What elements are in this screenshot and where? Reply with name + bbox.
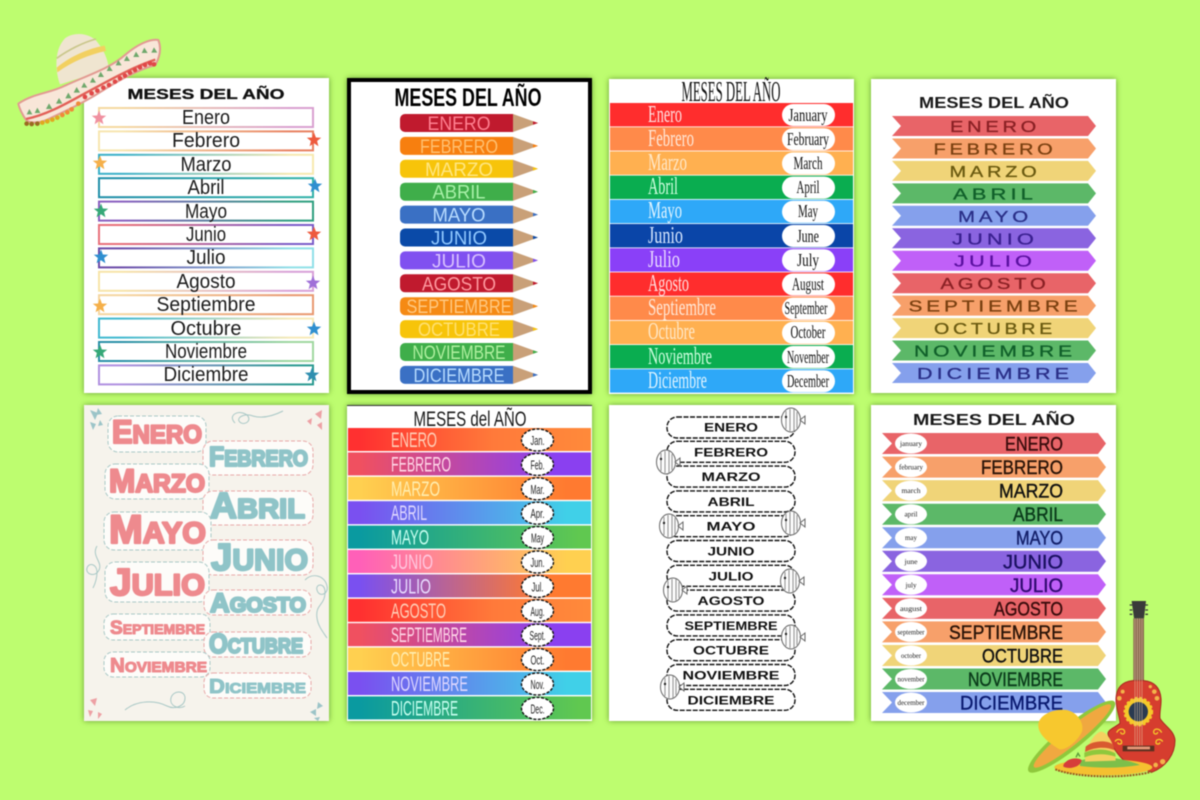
ribbon: Octubre: OCTUBRE [982,646,1063,668]
icon: sombrero top-left [18,34,160,126]
ribbon: Mayo: MAYO [1016,528,1063,550]
box: Septiembre: SEPTIEMBRE [110,618,205,639]
stripe: Enero [348,428,591,452]
ribbon: Noviembre: NOVIEMBRE [968,669,1063,691]
stripe: Febrero: Feb. [530,457,544,472]
ribbon: Diciembre [882,692,1106,714]
stripe: Agosto [610,271,853,297]
row: Julio [94,247,313,269]
pencil: Enero [400,114,538,135]
stripe: Mayo: May [798,201,818,221]
pencil: Junio [400,228,538,250]
ribbon: Junio: JUNIO [1003,551,1063,573]
row: Agosto: Agosto [176,271,236,293]
heading: MESES del AÑO [414,407,526,431]
ribbon: Agosto: august [900,604,923,613]
box: Octubre: OCTUBRE [209,628,303,659]
icon: lower sombrero [1054,732,1152,776]
ribbon: Abril: april [904,510,918,519]
heading: MESES DEL AÑO [394,82,542,112]
stripe: Marzo [348,477,591,501]
ribbon: Enero: ENERO [1005,434,1063,456]
stripe: Mayo [610,198,853,224]
pencil: Mayo: MAYO [432,206,486,227]
stripe: Junio [348,550,591,574]
panel: ribbons with English ovals [871,405,1116,721]
box: Noviembre: NOVIEMBRE [110,655,207,677]
stripe: Septiembre [610,295,853,321]
stripe: Abril: April [796,177,820,197]
stripe: Diciembre [348,696,591,720]
ribbon: Enero [892,116,1096,136]
pill: Mayo: MAYO [706,522,756,534]
box: Agosto: AGOSTO [210,588,306,618]
pencil: Septiembre: SEPTIEMBRE [406,297,512,318]
panel: spaced ribbons [871,79,1116,393]
stripe: Septiembre: Septiembre [648,295,716,321]
stripe: Octubre: October [790,322,826,342]
stripe: Febrero [348,452,591,476]
ribbon: Enero: ENERO [950,119,1040,136]
pill: Enero: ENERO [704,422,758,434]
stripe: Diciembre [610,368,853,394]
panel: gradient stripes with dashed ovals [347,405,592,721]
stripe: Enero: January [788,105,828,125]
stripe: Febrero: February [787,129,829,149]
ribbon: Diciembre: december [898,698,925,707]
stripe: Abril: Apr. [530,506,544,521]
pill: Marzo: MARZO [702,472,761,484]
stripe: Marzo: MARZO [391,478,440,501]
ribbon: Junio: JUNIO [952,231,1038,248]
ribbon: Agosto [892,273,1096,293]
row: Agosto [99,271,320,293]
stripe: Septiembre: Sept. [530,628,546,643]
stripe: Septiembre: September [784,298,828,318]
stripe: Enero: Enero [648,102,682,128]
row: Marzo: Marzo [180,154,232,176]
stripe: Mayo: MAYO [391,527,429,550]
pencil: Mayo [400,206,538,227]
stripe: Junio: June [797,226,819,246]
pill: Junio [667,540,795,562]
ribbon: Abril [882,504,1106,526]
pill: Febrero: FEBRERO [694,447,768,459]
ribbon: Febrero [892,138,1096,158]
stripe: Septiembre [348,623,591,647]
stripe: Octubre [610,319,853,345]
stripe: Agosto: Agosto [648,271,689,297]
row: Diciembre: Diciembre [164,364,248,386]
stripe: Julio [610,247,853,273]
row: Abril: Abril [188,177,224,199]
heading: MESES DEL AÑO [913,409,1075,429]
stripe: Diciembre: Diciembre [648,368,707,394]
stripe: Julio: Julio [648,247,680,273]
stripe: Enero: Jan. [530,433,544,448]
pencil: Febrero: FEBRERO [420,137,498,158]
ribbon: Septiembre [892,296,1096,316]
ribbon: Mayo [882,527,1106,550]
box: Diciembre: DICIEMBRE [209,676,306,698]
ribbon: Mayo: may [905,533,917,542]
ribbon: Mayo [892,206,1096,226]
ribbon: Julio: JULIO [1010,575,1063,597]
pencil: Julio [400,251,538,272]
row: Febrero: Febrero [172,130,240,152]
ribbon: Junio [892,228,1096,248]
pencil: Marzo: MARZO [425,160,493,181]
stripe: Abril [348,501,591,525]
stripe: Febrero [610,126,853,152]
row: Septiembre [93,294,313,316]
ribbon: Noviembre: november [898,674,925,684]
ribbon: Agosto: AGOSTO [940,276,1050,293]
icon: guitar and sombreros bottom-right [1021,601,1175,781]
stripe: Diciembre: December [787,371,829,391]
pencil: Enero: ENERO [428,114,490,135]
pencil: Junio: JUNIO [431,228,487,250]
stripe: Marzo: March [794,153,822,173]
row: Enero: Enero [182,107,230,129]
pill: Noviembre: NOVIEMBRE [682,670,780,682]
stripe: Agosto [348,599,591,623]
heading: MESES DEL AÑO [128,85,285,103]
ribbon: Noviembre [882,668,1106,691]
stripe: Agosto: August [792,274,824,294]
ribbon: Marzo [882,480,1106,503]
stripe: Julio: JULIO [391,575,431,598]
stripe: Noviembre: NOVIEMBRE [391,673,468,696]
stripe: Julio [348,574,591,598]
ribbon: Octubre [892,318,1096,338]
ribbon: Julio [882,574,1106,597]
stripe: Agosto: AGOSTO [391,600,446,623]
row: Abril [99,177,322,199]
row: Marzo [93,154,313,176]
stripe: Abril: ABRIL [391,502,427,525]
box: Junio: JUNIO [211,537,308,579]
panel: rainbow stripes with English pills: MESES DEL AÑO [682,77,780,108]
stripe: Agosto: Aug. [530,604,544,619]
stripe: Octubre: OCTUBRE [391,649,450,672]
stripe: Noviembre [348,672,591,696]
ribbon: Septiembre: september [898,627,925,636]
ribbon: Diciembre [892,363,1096,383]
pill: Mayo [667,516,795,537]
ribbon: Septiembre [882,621,1106,644]
box: Febrero: FEBRERO [209,441,308,472]
pill: Septiembre: SEPTIEMBRE [684,621,778,633]
stripe: Julio: July [797,250,819,270]
ribbon: Marzo [892,161,1096,181]
stripe: Diciembre: Dec. [530,701,544,716]
box: Julio: JULIO [110,562,205,604]
pill: Marzo [667,466,795,487]
panel: black dashed pills with fish [609,405,854,721]
ribbon: Marzo: MARZO [999,481,1063,503]
ribbon: Mayo: MAYO [958,209,1032,226]
row: Enero [92,107,313,129]
ribbon: Junio: june [903,557,918,566]
row: Mayo: Mayo [185,201,227,223]
ribbon: Noviembre: NOVIEMBRE [914,344,1076,360]
stripe: Octubre: Octubre [648,319,695,345]
pencil: Octubre: OCTUBRE [418,320,500,341]
pill: Octubre [667,640,795,661]
stripe: Febrero: FEBRERO [391,453,451,476]
ribbon: Febrero: FEBRERO [934,142,1056,158]
stripe: Diciembre: DICIEMBRE [391,697,458,720]
stripe: Marzo [610,150,853,176]
pill: Febrero [667,441,795,462]
ribbon: Junio [882,551,1106,573]
ribbon: Octubre: october [901,651,921,660]
stripe: Abril [610,174,853,200]
icon: guitar [1108,601,1175,772]
box: Abril: ABRIL [210,485,305,526]
row: Septiembre: Septiembre [156,294,256,316]
stripe: Noviembre [610,344,853,370]
heading: MESES DEL AÑO [919,92,1069,112]
stripe: Junio: Jun. [530,555,544,570]
ribbon: Abril [892,183,1096,203]
stripe: Mayo: Mayo [648,198,682,224]
stripe: Enero: ENERO [391,429,437,452]
ribbon: Abril: ABRIL [1013,504,1063,526]
ribbon: Noviembre [892,340,1096,360]
ribbon: Abril: ABRIL [953,186,1037,203]
pencil: Agosto [400,274,538,295]
stripe: Enero [610,102,853,128]
ribbon: Septiembre: SEPTIEMBRE [949,622,1063,644]
pill: Agosto: AGOSTO [698,596,765,608]
row: Junio [99,224,321,246]
pill: Julio [667,565,795,586]
ribbon: Diciembre: DICIEMBRE [960,692,1063,714]
pencil: Agosto: AGOSTO [422,274,496,295]
ribbon: Septiembre: SEPTIEMBRE [908,299,1082,316]
box: Enero: ENERO [112,414,202,450]
panel: pencils [349,80,590,392]
stripe: Marzo: Mar. [530,482,544,497]
panel: pastel bubble letters [84,405,329,721]
box: Mayo: MAYO [109,508,206,552]
ribbon: Octubre: OCTUBRE [934,321,1056,338]
box: Marzo: MARZO [109,463,205,499]
stripe: Julio: Jul. [532,579,544,594]
stripe: Mayo [348,526,591,550]
ribbon: Febrero: FEBRERO [981,457,1063,479]
stripe: Junio: Junio [648,223,683,249]
stripe: Junio: JUNIO [391,551,433,574]
row: Julio: Julio [186,247,226,269]
ribbon: Julio [892,251,1096,271]
stripe: Febrero: Febrero [648,126,694,152]
stripe: Abril: Abril [648,174,678,200]
stripe: Mayo: May [531,531,544,546]
ribbon: Julio: JULIO [954,254,1036,271]
row: Febrero [99,130,321,152]
pill: Septiembre [667,615,795,636]
stripe: Octubre: Oct. [530,653,544,668]
panel: rainbow stripes with English pills [609,77,854,394]
ribbon: Marzo: march [902,486,921,495]
pencil: Marzo [400,160,538,181]
stripe: Septiembre: SEPTIEMBRE [391,624,467,647]
ribbon: Enero: january [899,439,922,448]
pill: Julio: JULIO [708,571,754,583]
ribbon: Enero [882,433,1106,456]
pencil: Febrero [400,137,538,158]
ribbon: Agosto [882,598,1106,620]
stripe: Octubre [348,648,591,672]
stripe: Noviembre: November [787,347,829,367]
pill: Junio: JUNIO [708,546,755,558]
row: Noviembre: Noviembre [165,341,247,363]
row: Noviembre [93,341,313,363]
ribbon: Marzo: MARZO [950,164,1040,181]
pill: Enero [667,417,795,438]
pencil: Abril: ABRIL [432,183,486,204]
row: Octubre [99,318,321,340]
pencil: Noviembre: NOVIEMBRE [412,343,506,364]
pill: Abril: ABRIL [708,497,754,509]
row: Mayo [94,201,313,223]
pill: Diciembre: DICIEMBRE [688,695,775,707]
pill: Agosto [667,590,795,611]
ribbon: Febrero [882,457,1106,479]
icon: tilted sombrero [1021,693,1122,781]
ribbon: Febrero: february [899,463,923,472]
ribbon: Octubre [882,645,1106,668]
pencil: Octubre [400,320,538,341]
ribbon: Diciembre: DICIEMBRE [917,366,1073,383]
pill: Diciembre [667,689,795,710]
pill: Noviembre [667,664,795,686]
pill: Abril [667,491,795,512]
stripe: Junio [610,223,853,249]
stripe: Noviembre: Nov. [530,677,544,692]
panel: stars and outlined boxes [84,78,329,393]
row: Junio: Junio [186,224,226,246]
pencil: Diciembre: DICIEMBRE [414,366,504,387]
pencil: Julio: JULIO [432,251,486,272]
ribbon: Agosto: AGOSTO [994,598,1063,620]
ribbon: Julio: july [905,580,917,589]
pencil: Abril [400,183,538,204]
row: Diciembre [99,364,319,386]
stripe: Noviembre: Noviembre [648,344,712,370]
pill: Octubre: OCTUBRE [693,646,769,658]
row: Octubre: Octubre [170,318,242,340]
icons: fish [656,408,805,699]
stripe: Marzo: Marzo [648,150,687,176]
